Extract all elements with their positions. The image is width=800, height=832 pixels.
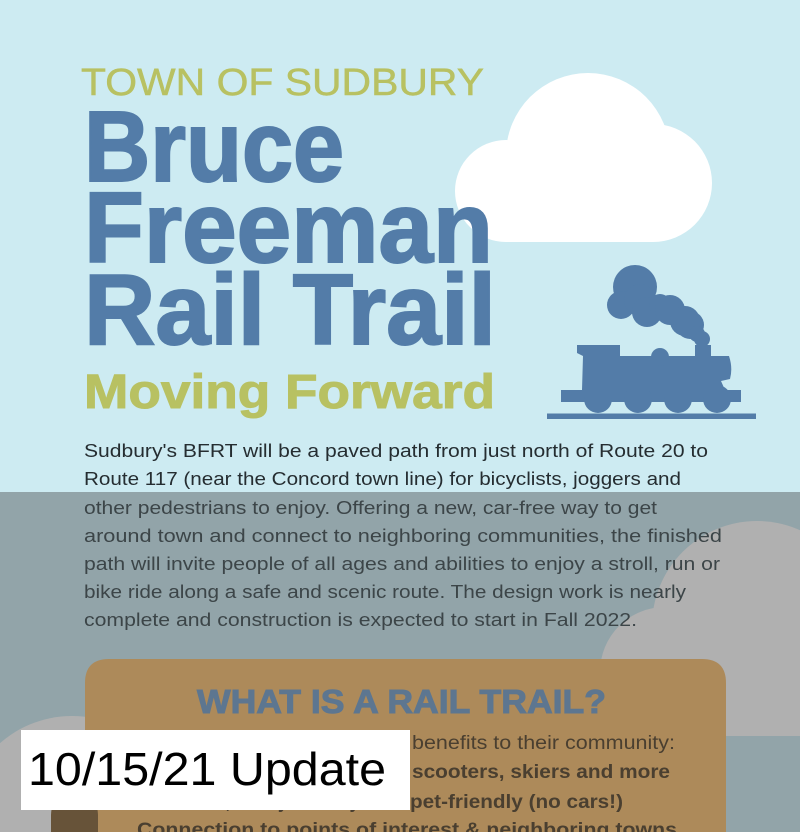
body text: upper lines: Sudbury's BFRT will be a paved path from just north of Route 20 to bbox=[84, 440, 708, 461]
title: town name: TOWN OF SUDBURY bbox=[81, 62, 484, 104]
panel text: Safe, family-friendly and bbox=[187, 792, 397, 813]
subtitle: Moving Forward bbox=[84, 366, 495, 419]
body text: lower lines: around town and connect to neighboring communities, the finished bbox=[84, 525, 722, 546]
body text: lower lines: bike ride along a safe and scenic route. The design work is nearly bbox=[84, 581, 687, 602]
panel text: pet-friendly (no cars!) bbox=[410, 792, 623, 813]
cloud: top bbox=[455, 73, 712, 242]
panel text: Rail trails bring many bbox=[135, 733, 396, 754]
panel text: scooters, skiers and more bbox=[412, 762, 670, 783]
cloud: lower right bbox=[600, 521, 800, 737]
panel heading: WHAT IS A RAIL TRAIL? bbox=[197, 683, 606, 720]
icon: steam train bbox=[547, 265, 756, 419]
body text: lower lines bbox=[84, 497, 722, 630]
dimmed overlay background bbox=[0, 492, 800, 832]
update label: 10/15/21 Update bbox=[28, 743, 386, 795]
body text: upper lines bbox=[84, 440, 708, 489]
title: Bruce Freeman Rail Trail: Rail Trail bbox=[84, 254, 496, 366]
update label bbox=[21, 730, 410, 810]
body text: lower lines: complete and construction is expected to start in Fall 2022. bbox=[84, 609, 637, 630]
panel: what is a rail trail bbox=[85, 659, 726, 832]
cloud: lower left bbox=[0, 716, 181, 832]
title: Bruce Freeman Rail Trail: Freeman bbox=[84, 172, 493, 284]
panel text: Trails for walkers, bikers, bbox=[140, 762, 400, 783]
panel text: benefits to their community: bbox=[412, 733, 675, 754]
body text: lower lines: other pedestrians to enjoy. Offering a new, car-free way to get bbox=[84, 497, 657, 518]
title: Bruce Freeman Rail Trail bbox=[84, 91, 496, 366]
panel text bbox=[135, 733, 677, 832]
body text: lower lines: path will invite people of all ages and abilities to enjoy a stroll, run or bbox=[84, 553, 720, 574]
title: Bruce Freeman Rail Trail: Bruce bbox=[84, 91, 344, 203]
body text: upper lines: Route 117 (near the Concord town line) for bicyclists, joggers and bbox=[84, 468, 681, 489]
tree trunk bbox=[51, 790, 98, 832]
